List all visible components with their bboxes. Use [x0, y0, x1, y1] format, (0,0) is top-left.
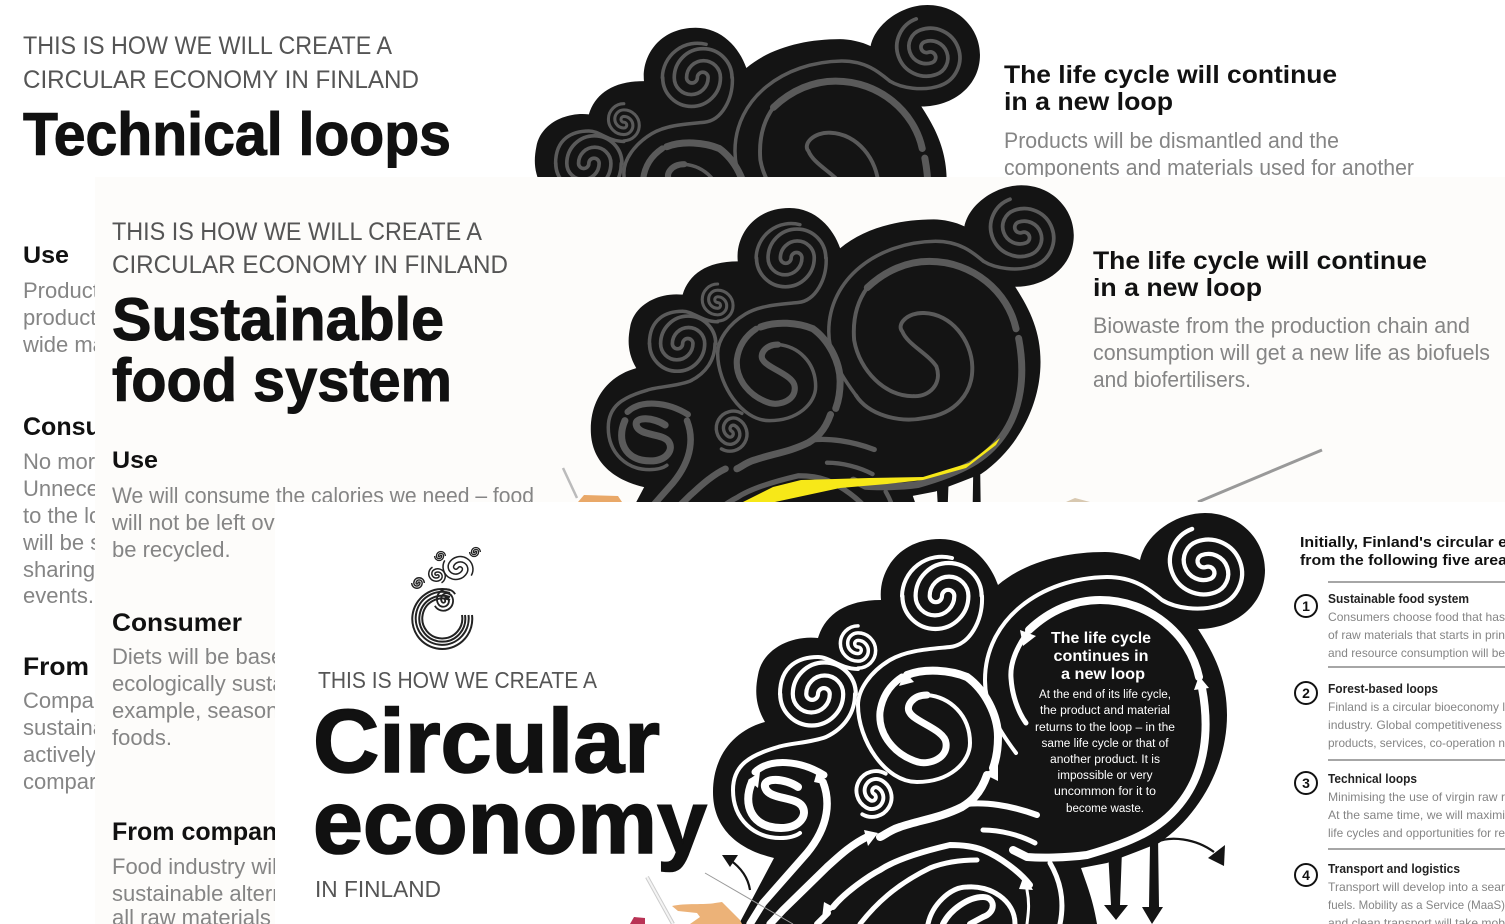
text: products dismantled	[1004, 128, 1414, 180]
spiral tree	[591, 185, 1074, 559]
section: from companies: Compan	[23, 688, 106, 713]
intro line	[23, 32, 419, 94]
area 1: sustainable food system: 1	[1302, 598, 1310, 614]
area 4: transport and logistics: Transport will develop into a sear	[1328, 880, 1505, 894]
text: products dismantled: Products will be dismantled and the	[1004, 128, 1339, 153]
area 2: forest-based loops: Finland is a circular bioeconomy l	[1328, 700, 1505, 714]
area 2: forest-based loops: products, services, co-operation n	[1328, 736, 1505, 750]
spiral tree	[497, 5, 980, 379]
area 3: technical loops: life cycles and opportunities for re	[1328, 826, 1505, 840]
panel: technical loops page	[22, 5, 1414, 794]
callout: life cycle continues: returns to the loop – in the	[1035, 722, 1175, 734]
callout: life cycle continues: At the end of its life cycle,	[1039, 689, 1171, 701]
callout: life cycle continues: impossible or very	[1058, 770, 1153, 782]
section: consumer: Diets will be based	[112, 644, 295, 669]
section: use: Use	[23, 242, 69, 269]
callout: life cycle continues: continues in	[1054, 648, 1148, 665]
text: biowaste: Biowaste from the production chain and	[1093, 313, 1470, 338]
thin device line	[705, 873, 793, 924]
section: from companies	[112, 818, 284, 924]
area 2: forest-based loops	[1295, 667, 1505, 750]
heading: life cycle: The life cycle will continue	[1093, 247, 1427, 275]
text: biowaste: consumption will get a new life as biofuels	[1093, 340, 1490, 365]
callout: life cycle continues: same life cycle or that of	[1042, 738, 1169, 750]
laptop and hand	[563, 468, 622, 502]
intro line: CIRCULAR ECONOMY IN FINLAND	[23, 66, 419, 94]
area 3: technical loops: At the same time, we will maximi	[1328, 808, 1505, 822]
heading: five areas: from the following five area	[1300, 552, 1505, 569]
area 1: sustainable food system	[1295, 582, 1505, 660]
callout: life cycle continues: uncommon for it to	[1054, 786, 1156, 798]
section: from companies: Food industry will	[112, 854, 282, 879]
heading: life cycle: in a new loop	[1004, 88, 1173, 116]
section: consumer: Consumer	[112, 609, 242, 637]
section: consumer: Unneces	[23, 476, 110, 501]
heading: technical loops: Technical loops	[23, 101, 451, 168]
section: use: will not be left over	[111, 510, 294, 535]
heading: sustainable food system	[112, 286, 452, 414]
area 3: technical loops: 3	[1302, 775, 1310, 791]
section: consumer: Consumer	[23, 413, 147, 441]
heading: five areas	[1300, 534, 1505, 569]
callout: life cycle continues	[1035, 630, 1175, 815]
section: consumer: foods.	[112, 725, 172, 750]
panel background	[95, 177, 1505, 924]
section: consumer	[22, 413, 147, 608]
hand	[672, 902, 742, 924]
area 3: technical loops: Minimising the use of virgin raw r	[1328, 790, 1505, 804]
section: use: Products	[23, 278, 110, 303]
section: from companies: From compan	[112, 818, 277, 846]
heading: life cycle	[1004, 61, 1337, 116]
section: consumer: to the lo	[23, 503, 101, 528]
big spiral in the tree	[854, 288, 972, 420]
section: use	[111, 447, 534, 562]
section: consumer: sharing	[23, 557, 95, 582]
section: consumer: ecologically susta	[112, 671, 285, 696]
area 2: forest-based loops: Forest-based loops	[1328, 682, 1438, 696]
intro line: THIS IS HOW WE WILL CREATE A	[112, 218, 482, 246]
area 2: forest-based loops: industry. Global competitiveness	[1328, 718, 1502, 732]
area 4: transport and logistics: Transport and logistics	[1328, 862, 1460, 876]
area 4: transport and logistics	[1295, 849, 1505, 924]
yellow loop accent	[743, 438, 1000, 502]
big spiral in the tree	[760, 107, 879, 239]
area 1: sustainable food system: Consumers choose food that has	[1328, 610, 1505, 624]
arrow: curved right	[1157, 839, 1225, 866]
panel background	[275, 502, 1505, 924]
section: use	[22, 242, 110, 357]
section: use: be recycled.	[112, 537, 231, 562]
area 4: transport and logistics: 4	[1302, 867, 1310, 883]
heading: circular economy	[313, 692, 707, 873]
section: from companies: actively	[23, 742, 96, 767]
heading: sustainable food system: Sustainable	[112, 286, 444, 353]
heading: life cycle	[1093, 247, 1427, 302]
text: products dismantled: components and materials used for another	[1004, 155, 1414, 180]
callout: life cycle continues: a new loop	[1061, 666, 1145, 683]
spiral tree with white loops	[713, 513, 1265, 924]
area 3: technical loops: Technical loops	[1328, 772, 1417, 786]
area 1: sustainable food system: of raw materials that starts in prin	[1328, 628, 1505, 642]
heading: life cycle: The life cycle will continue	[1004, 61, 1337, 89]
section: consumer: No more	[23, 449, 107, 474]
heading: five areas: Initially, Finland's circular e	[1300, 534, 1505, 551]
callout: life cycle continues: the product and material	[1040, 705, 1170, 717]
section: from companies	[23, 653, 106, 794]
intro line: THIS IS HOW WE CREATE A	[318, 667, 598, 693]
area 3: technical loops	[1295, 760, 1505, 840]
subheading: in Finland: IN FINLAND	[315, 876, 441, 902]
section: use: products	[23, 305, 107, 330]
arrow: curved left	[722, 855, 750, 890]
area 1: sustainable food system: and resource consumption will be	[1328, 646, 1505, 660]
heading: circular economy: Circular	[313, 692, 660, 792]
section: from companies: From	[23, 653, 89, 681]
section: consumer: example, seasonal	[112, 698, 295, 723]
text: biowaste: and biofertilisers.	[1093, 367, 1251, 392]
callout: life cycle continues: another product. It is	[1050, 754, 1160, 766]
section: from companies: sustaina	[23, 715, 106, 740]
icon: spiral logo	[412, 548, 480, 649]
heading: sustainable food system: food system	[112, 347, 452, 414]
section: use: wide ma	[22, 332, 106, 357]
heading: circular economy: economy	[313, 773, 707, 873]
section: from companies: sustainable altern	[112, 881, 284, 906]
intro line: CIRCULAR ECONOMY IN FINLAND	[112, 251, 508, 279]
intro line	[112, 218, 508, 279]
grey device line	[1066, 450, 1322, 502]
heading: life cycle: in a new loop	[1093, 274, 1262, 302]
panel: sustainable food system page	[95, 177, 1505, 924]
text: biowaste	[1093, 313, 1490, 392]
area 1: sustainable food system: Sustainable food system	[1328, 592, 1469, 606]
callout: life cycle continues: become waste.	[1066, 803, 1144, 815]
intro line: THIS IS HOW WE WILL CREATE A	[23, 32, 392, 60]
section: use: Use	[112, 447, 158, 474]
inner arc and arrowheads	[748, 630, 1209, 918]
section: consumer: events.	[23, 583, 94, 608]
section: from companies: compar	[23, 769, 96, 794]
section: consumer: will be s	[22, 530, 101, 555]
section: consumer	[112, 609, 295, 750]
panel: circular economy page	[275, 502, 1505, 924]
callout: life cycle continues: The life cycle	[1051, 630, 1151, 647]
laptop illustration	[630, 877, 673, 924]
area 2: forest-based loops: 2	[1302, 685, 1310, 701]
section: use: We will consume the calories we need – food	[112, 483, 534, 508]
